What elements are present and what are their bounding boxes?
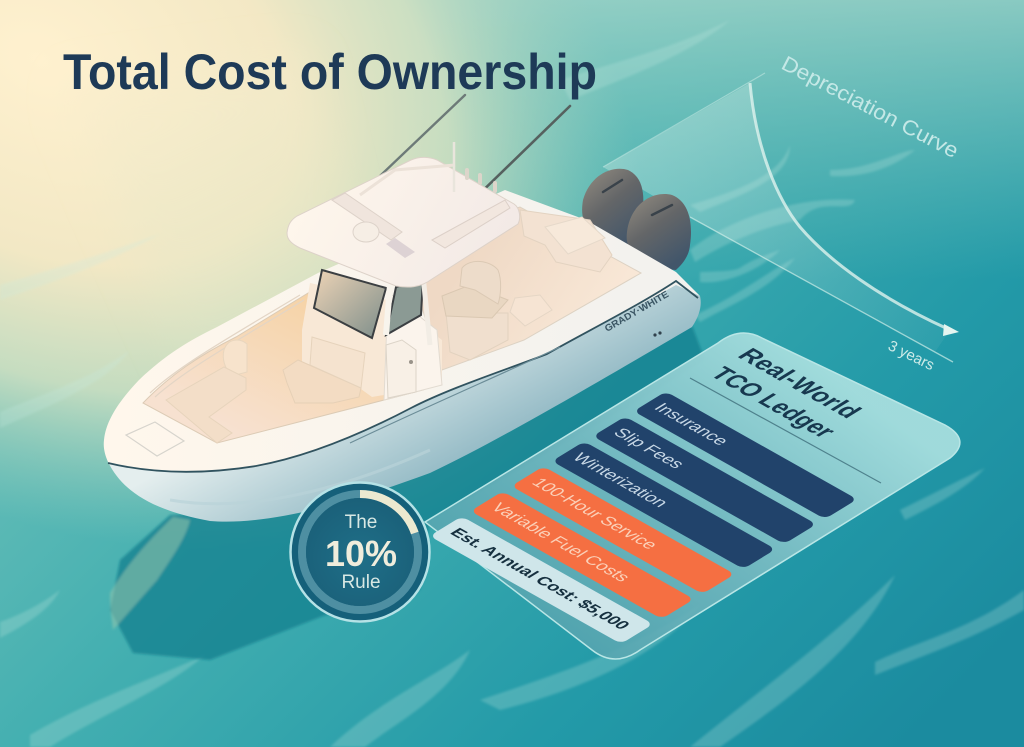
rod holders <box>467 170 495 191</box>
curve label: Depreciation Curve <box>778 52 962 163</box>
boat name: GRADY·WHITE <box>603 289 671 335</box>
curve panel <box>603 83 950 352</box>
title: Total Cost of Ownership <box>63 44 597 100</box>
axis lines <box>603 73 765 167</box>
ledger heading: Real-World <box>731 345 867 422</box>
row: estimated annual cost <box>430 516 653 644</box>
row: insurance <box>634 391 857 519</box>
outboard motors <box>582 169 691 270</box>
deck <box>104 190 700 471</box>
rear bench <box>520 210 612 272</box>
badge text: The <box>345 512 377 533</box>
row: variable fuel costs <box>470 491 694 619</box>
row: winterization: Winterization <box>568 450 673 510</box>
badge: the 10% rule <box>290 482 430 622</box>
ledger rows group <box>430 341 940 644</box>
curve line <box>750 83 948 329</box>
fishing rods <box>360 95 570 240</box>
boat <box>104 142 701 522</box>
console <box>302 283 442 397</box>
gunwale lines <box>150 295 304 397</box>
row: estimated annual cost: Est. Annual Cost: $5,000 <box>446 526 633 632</box>
antenna <box>453 142 455 192</box>
hard top <box>287 157 520 287</box>
windshield <box>314 270 386 338</box>
sheer stripe <box>108 281 698 472</box>
motor: rear <box>582 169 643 252</box>
ledger heading: TCO Ledger <box>704 364 841 442</box>
arrow head <box>943 324 959 336</box>
helm seat <box>283 360 361 403</box>
bow seats <box>223 340 247 376</box>
panel: TCO ledger card <box>425 333 960 659</box>
deck hatch <box>510 295 552 326</box>
row: winterization <box>552 441 776 569</box>
row: variable fuel costs: Variable Fuel Costs <box>487 500 636 585</box>
badge: the 10% rule: 10% <box>325 533 397 574</box>
depreciation curve <box>603 52 962 374</box>
row: insurance: Insurance <box>650 400 734 448</box>
boat shadow on water <box>110 320 705 660</box>
radar and rack <box>332 193 402 240</box>
row: 100-hour service: 100-Hour Service <box>527 475 663 552</box>
row: slip fees: Slip Fees <box>609 425 690 471</box>
rear cockpit <box>400 207 641 370</box>
row: slip fees <box>593 416 816 544</box>
hull side <box>108 280 701 522</box>
t-top pillars <box>423 275 430 345</box>
motor: front <box>627 194 691 270</box>
axis label: 3 years <box>885 337 937 374</box>
row: 100-hour service <box>511 466 735 594</box>
forward cockpit <box>143 280 423 443</box>
badge: the 10% rule: Rule <box>341 572 381 593</box>
ledger heading <box>703 345 870 442</box>
bow hatch <box>126 422 184 456</box>
leaning post seat <box>446 313 508 360</box>
